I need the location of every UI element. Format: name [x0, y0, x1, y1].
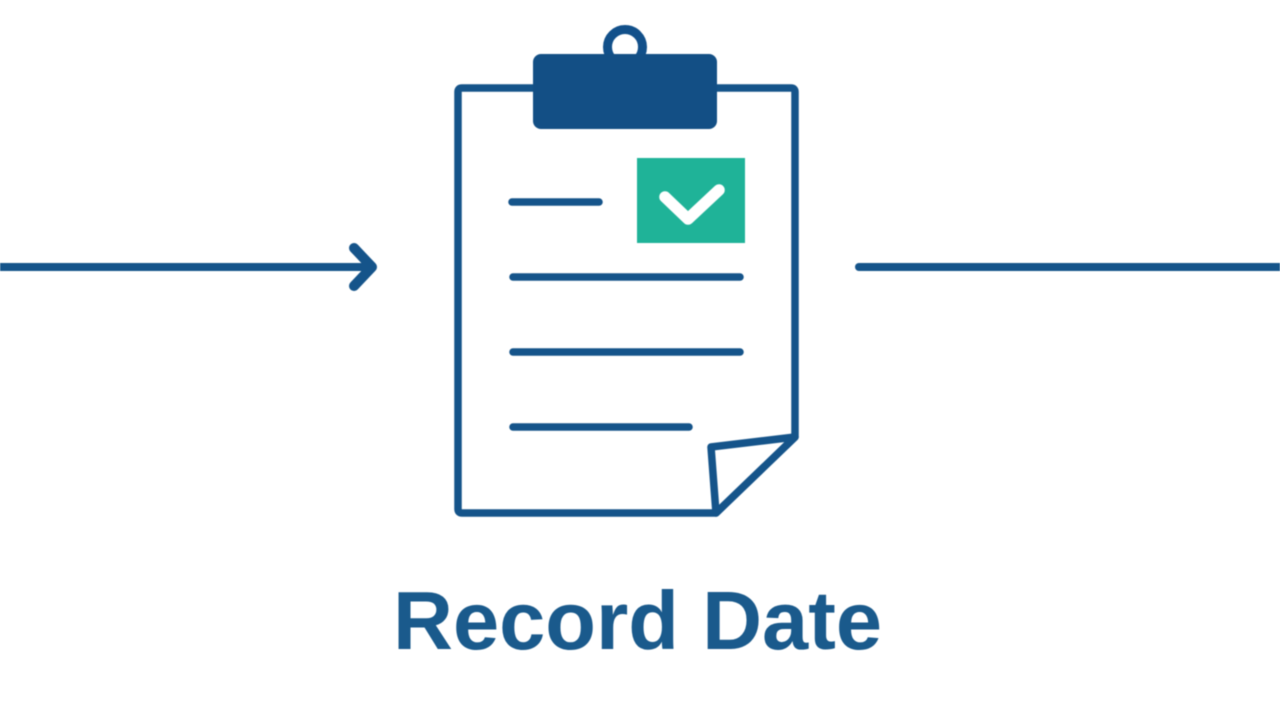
- text line: short: [512, 198, 599, 206]
- text line: second: [513, 273, 740, 281]
- folded page corner: [711, 437, 795, 513]
- check mark: [665, 190, 719, 219]
- text line: third: [513, 348, 740, 356]
- document outline: [458, 88, 795, 513]
- clip ring: [608, 30, 642, 64]
- heading: Record Date: Record Date: [393, 574, 882, 667]
- line: outgoing timeline: [859, 263, 1280, 271]
- text line: fourth: [513, 423, 689, 431]
- teal check box: [637, 158, 745, 243]
- icon: clipboard document: [458, 30, 795, 513]
- clip body: [533, 54, 717, 129]
- arrow: incoming timeline: [0, 248, 372, 286]
